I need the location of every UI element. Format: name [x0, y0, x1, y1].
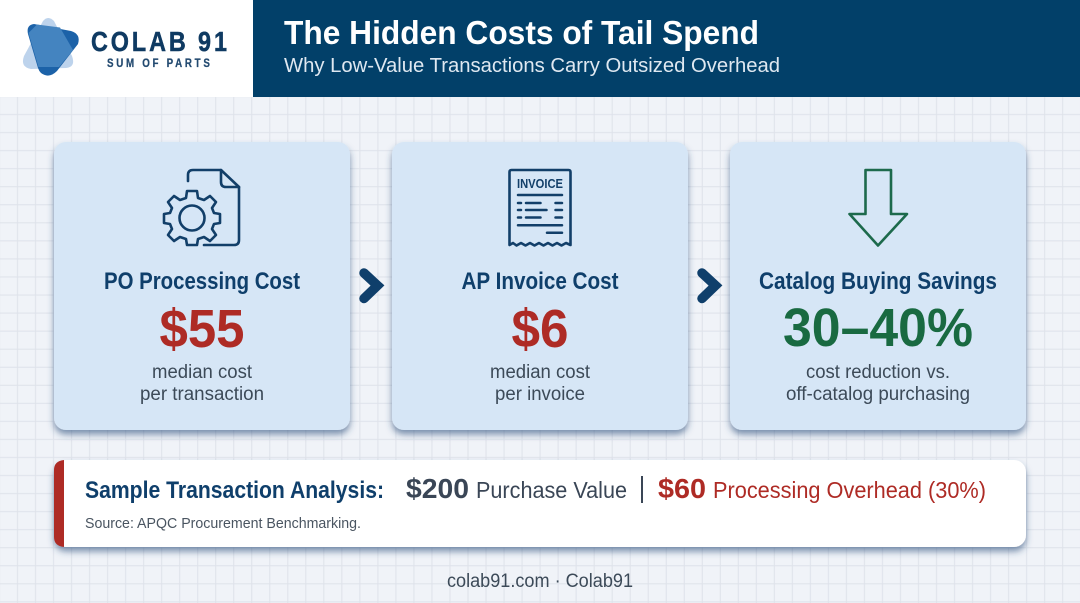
purchase value: $200 — [406, 473, 469, 504]
metric description — [140, 362, 264, 405]
arrow: PO to invoice — [364, 273, 378, 298]
subtitle: Why Low-Value Transactions Carry Outsized Overhead — [284, 55, 780, 77]
card heading: Catalog Buying Savings — [759, 268, 997, 295]
metric description: per invoice — [495, 384, 585, 405]
arrow: invoice to catalog — [702, 273, 716, 298]
panel: catalog buying savings — [730, 142, 1026, 430]
processing overhead — [658, 473, 986, 504]
card heading: AP Invoice Cost — [462, 268, 618, 295]
footer: colab91.com · Colab91 — [447, 571, 633, 592]
header: logo panel — [0, 0, 253, 97]
metric description: per transaction — [140, 384, 264, 405]
red accent bar — [54, 460, 64, 547]
metric description: cost reduction vs. — [806, 362, 950, 383]
logo tagline: SUM OF PARTS — [107, 57, 210, 70]
icon: document with gear — [164, 170, 239, 245]
panel: PO processing cost — [54, 142, 350, 430]
metric description — [786, 362, 970, 405]
metric value: $6 — [512, 299, 568, 359]
metric description: off-catalog purchasing — [786, 384, 970, 405]
metric description — [490, 362, 591, 405]
panel: AP invoice cost — [392, 142, 688, 430]
metric value: $55 — [160, 299, 244, 359]
analysis label: Sample Transaction Analysis: — [85, 477, 384, 504]
title: The Hidden Costs of Tail Spend — [284, 14, 759, 51]
metric description: median cost — [152, 362, 253, 383]
source note: Source: APQC Procurement Benchmarking. — [85, 516, 361, 532]
card heading: PO Processing Cost — [104, 268, 300, 295]
purchase value: Purchase Value — [476, 477, 627, 503]
panel: sample transaction analysis — [54, 460, 1026, 547]
icon: down arrow — [850, 170, 907, 246]
processing overhead: Processing Overhead (30%) — [713, 477, 986, 503]
logo wordmark: COLAB 91 — [91, 27, 227, 57]
header: title banner — [253, 0, 1080, 97]
metric value: 30–40% — [783, 298, 973, 358]
purchase value — [406, 473, 627, 504]
icon: invoice — [510, 170, 570, 246]
processing overhead: $60 — [658, 473, 706, 504]
metric description: median cost — [490, 362, 591, 383]
icon: Colab 91 logo — [23, 18, 79, 76]
icon: invoice: INVOICE — [517, 176, 563, 191]
